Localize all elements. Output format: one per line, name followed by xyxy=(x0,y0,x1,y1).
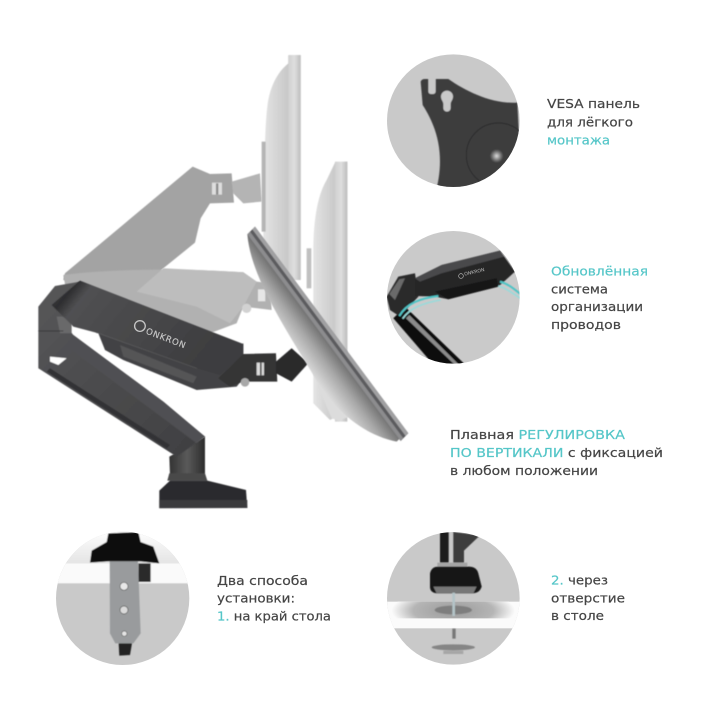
text: two mounting methods, desk edge xyxy=(217,573,331,624)
monitor arm: lower arm xyxy=(38,282,205,457)
text: two mounting methods, desk edge: Два способа xyxy=(217,573,308,588)
circle: VESA panel detail xyxy=(387,54,530,188)
text: vertical adjustment xyxy=(450,427,663,478)
text: updated cable system: проводов xyxy=(551,317,621,332)
ghost arm: lower position xyxy=(63,268,272,333)
text: updated cable system: организации xyxy=(551,299,643,314)
text: VESA panel xyxy=(547,96,640,148)
text: VESA panel: монтажа xyxy=(547,132,610,148)
text: VESA panel: для лёгкого xyxy=(547,114,633,130)
text: through desk hole: 2. через xyxy=(551,572,608,588)
ghost monitor: middle position xyxy=(307,162,350,422)
logo text: ONKRON xyxy=(144,327,187,351)
text: vertical adjustment: в любом положении xyxy=(450,463,598,478)
text: vertical adjustment: Плавная РЕГУЛИРОВКА xyxy=(450,427,626,442)
monitor arm: forearm with logo xyxy=(52,281,308,390)
monitor arm: base and column xyxy=(159,437,247,508)
logo text xyxy=(132,319,188,351)
tilted front monitor xyxy=(247,227,408,442)
circle: through-desk mount xyxy=(383,532,523,665)
ghost arm: upper position xyxy=(63,167,262,292)
text: through desk hole: в столе xyxy=(551,608,604,623)
ghost monitor: upper position xyxy=(262,55,301,280)
text: vertical adjustment: ПО ВЕРТИКАЛИ с фиксацией xyxy=(450,445,663,460)
text: two mounting methods, desk edge: 1. на край стола xyxy=(217,608,331,624)
text: updated cable system: система xyxy=(551,282,608,296)
text: through desk hole xyxy=(551,572,625,623)
circle: cable management detail: ONKRON xyxy=(464,267,486,278)
text: VESA panel: VESA панель xyxy=(547,96,640,111)
text: through desk hole: отверстие xyxy=(551,590,625,606)
text: two mounting methods, desk edge: установки: xyxy=(217,590,295,606)
circle: desk edge clamp xyxy=(53,530,193,665)
text: updated cable system: Обновлённая xyxy=(551,264,648,278)
circle: cable management detail xyxy=(387,231,522,367)
text: updated cable system xyxy=(551,264,648,332)
